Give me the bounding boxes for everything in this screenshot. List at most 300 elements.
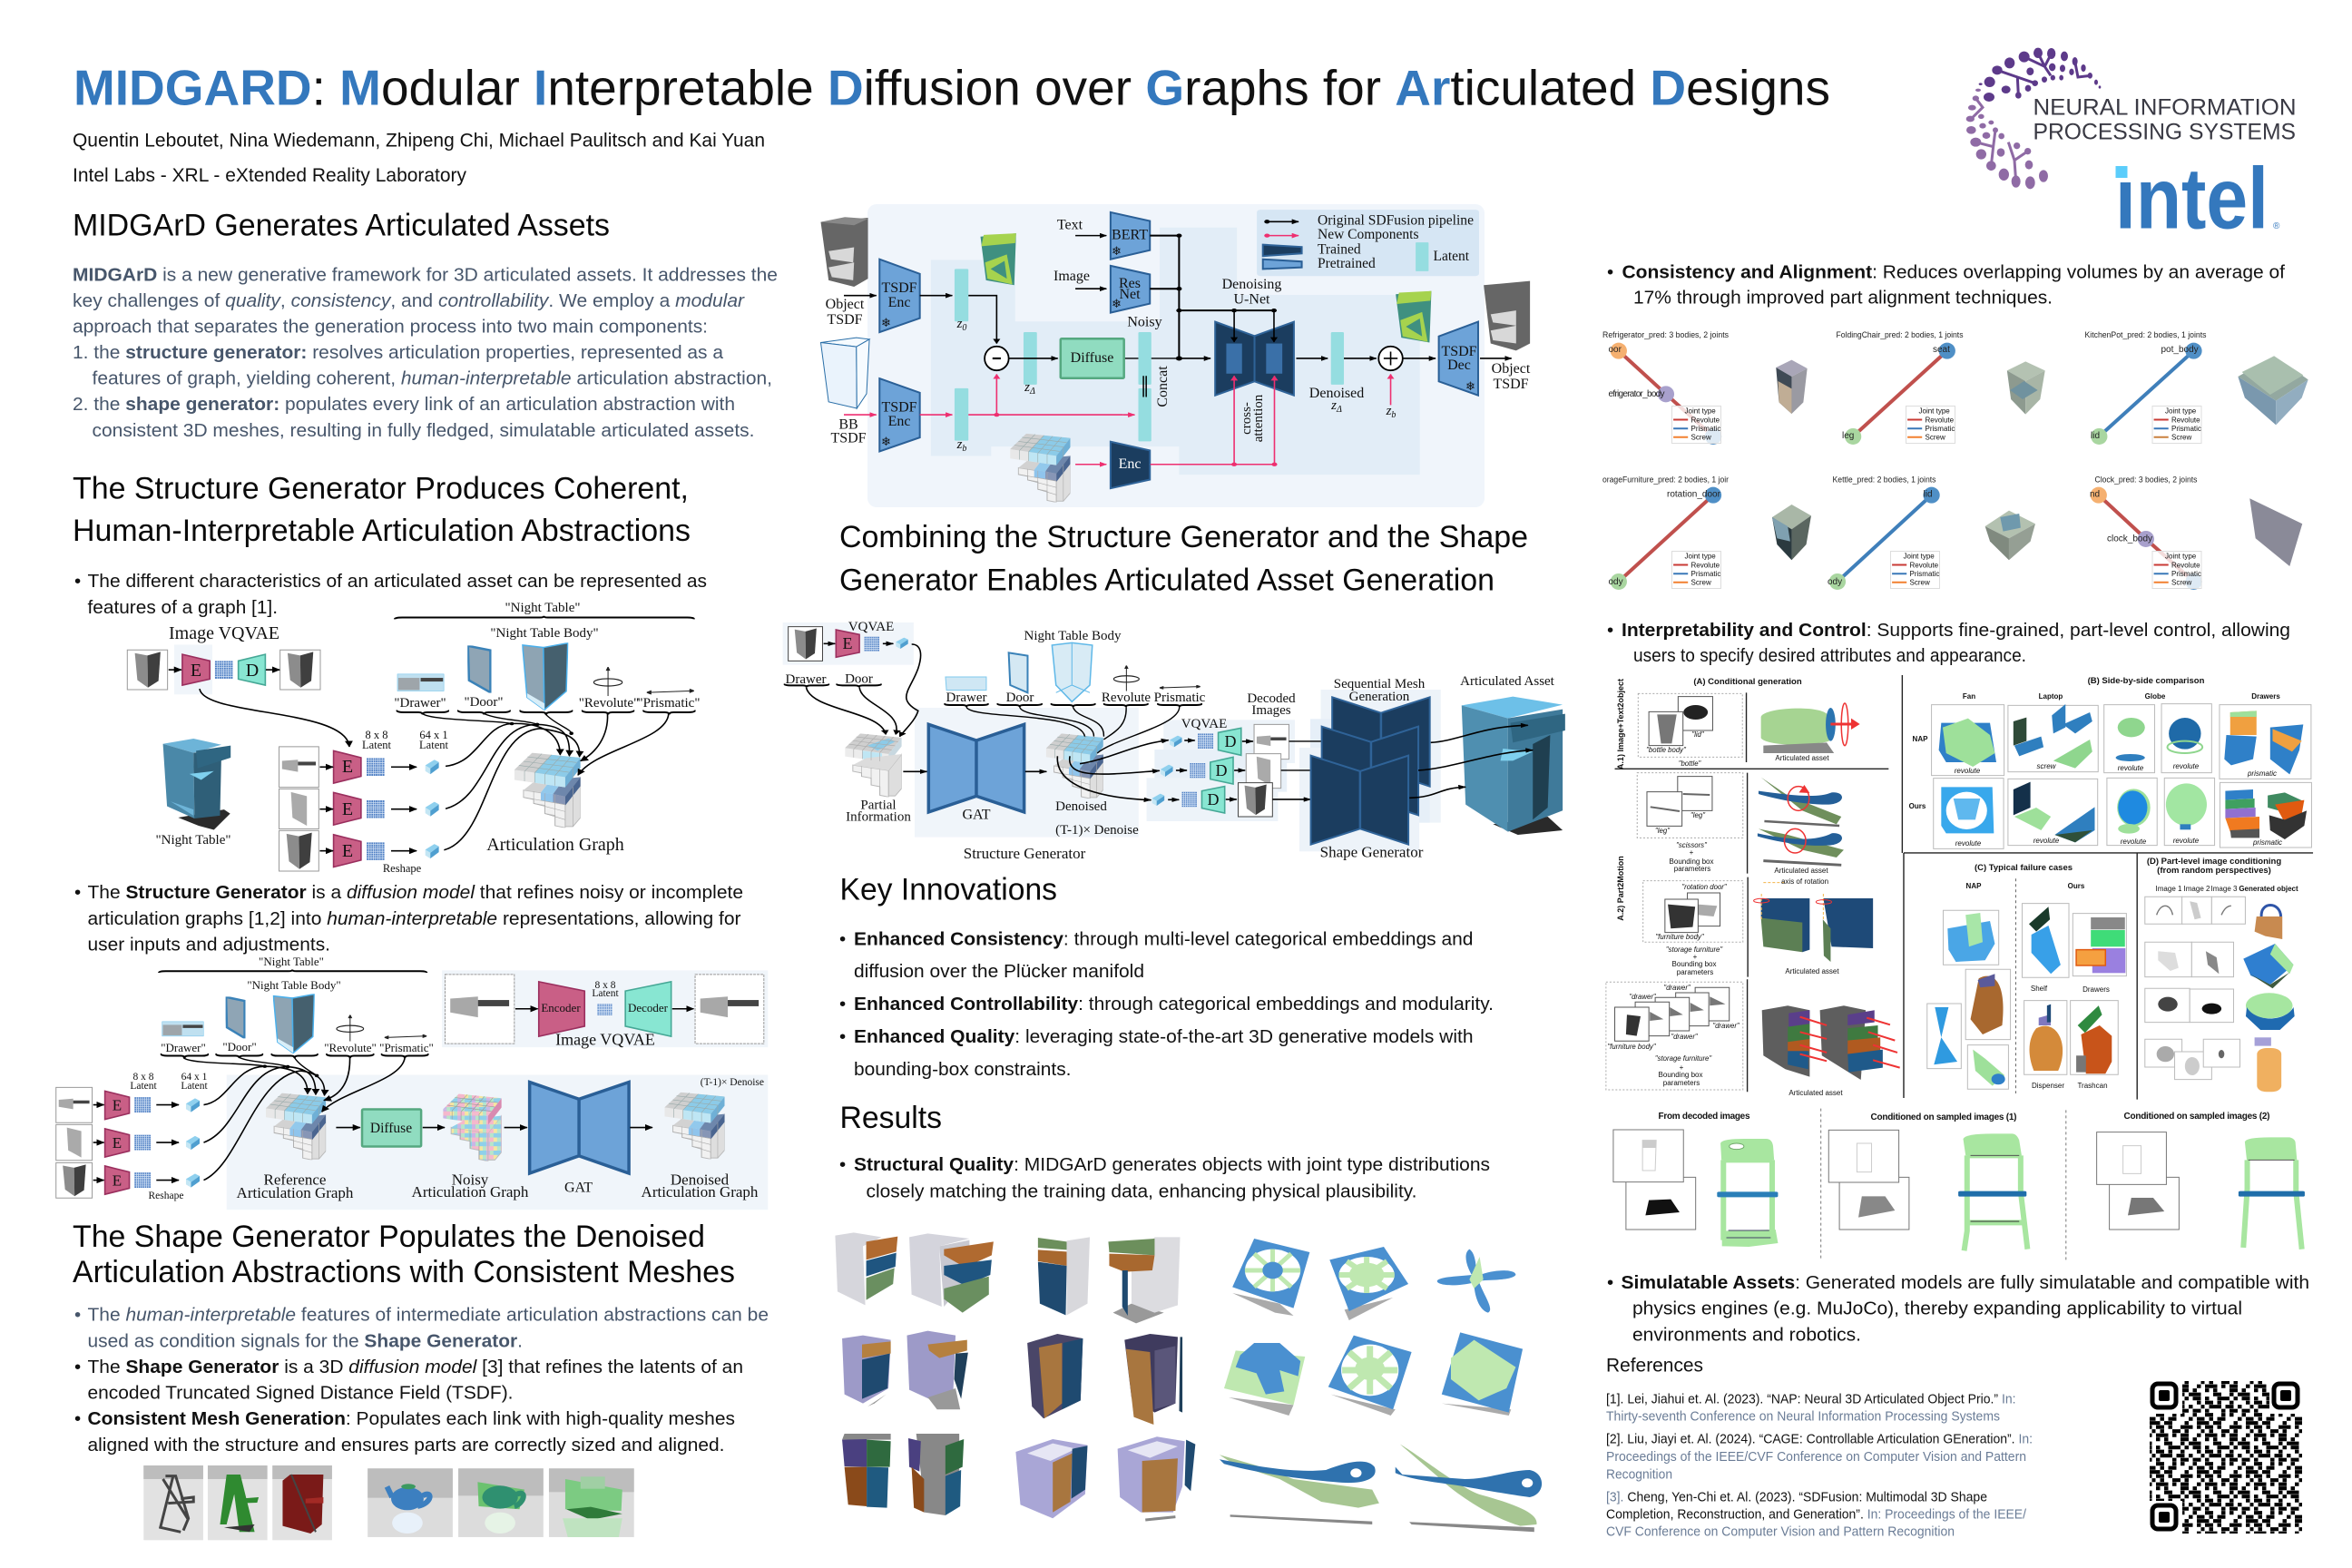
node labels: lid: [1924, 490, 1933, 499]
figure labels: "Night Table": [156, 833, 230, 848]
combined labels: D: [1216, 761, 1227, 779]
bullets: •: [839, 929, 846, 949]
legend 5: [1891, 552, 1940, 588]
bullets: •: [839, 994, 846, 1014]
architecture labels: Denoised: [1309, 386, 1364, 401]
legend labels: Latent: [1434, 249, 1470, 264]
bullet: interpretability and control: Interpretability and Control : Supports fine-grained, part-level control, allowing: [1622, 620, 2290, 641]
architecture labels: z: [957, 317, 962, 331]
Image VQVAE row: [127, 644, 320, 694]
bullets: Enhanced Consistency : through multi-level categorical embeddings and: [854, 929, 1474, 949]
parts: [946, 642, 1200, 701]
architecture labels: Net: [1119, 287, 1141, 302]
panel titles: (B) Side-by-side comparison: [2088, 676, 2205, 686]
logo: NeurIPS: [1966, 48, 2296, 189]
bullet: simulatable assets: Simulatable Assets: Generated models are fully simulatable and compatible with: [1621, 1272, 2309, 1293]
panel captions: +: [1693, 953, 1698, 961]
pipeline labels: "Revolute": [324, 1041, 377, 1054]
legend 4: Prismatic: [1691, 570, 1720, 578]
architecture labels: TSDF: [1493, 377, 1529, 392]
bullets: aligned with the structure and ensures parts are correctly sized and aligned.: [87, 1435, 724, 1455]
reference list: [3]. Cheng, Yen-Chi et. Al. (2023). “SDFusion: Multimodal 3D Shape: [1606, 1490, 1987, 1504]
intro paragraph: 2. the shape generator: populates every link of an articulation abstraction with: [73, 394, 735, 415]
architecture labels: z: [1331, 398, 1337, 413]
legend 2: Joint type: [1918, 407, 1950, 416]
panel C: [1927, 904, 2126, 1089]
encoders: [879, 212, 1478, 488]
combined labels: D: [1225, 732, 1236, 750]
snowflakes: ❄: [881, 435, 891, 448]
figure labels: 8 x 8: [365, 729, 388, 741]
edges: [1619, 351, 2193, 582]
panel captions: [1607, 730, 2282, 1097]
panel B: [1932, 704, 2311, 848]
bullet: structural quality: [839, 1154, 1490, 1201]
bullet: consistency and alignment: •: [1607, 261, 1613, 283]
feed curves: [966, 707, 1180, 800]
legend 3: [2152, 407, 2201, 443]
legend 4: Joint type: [1684, 552, 1716, 561]
snowflakes: [881, 244, 1475, 448]
panel captions: Dispenser: [2032, 1082, 2064, 1090]
legend 5: Joint type: [1904, 552, 1935, 561]
combined labels: (T-1)× Denoise: [1055, 823, 1139, 838]
reference list: [1]. Lei, Jiahui et. Al. (2023). “NAP: Neural 3D Articulated Object Prio.” In:: [1606, 1392, 2016, 1406]
panel captions: Image 3: [2211, 885, 2238, 893]
figure labels: "Night Table Body": [490, 626, 599, 641]
legend 6: Screw: [2171, 579, 2191, 586]
figure: combined pipeline: [783, 620, 1565, 862]
graph titles: orageFurniture_pred: 2 bodies, 1 joir: [1602, 475, 1729, 485]
figure labels: 64 x 1: [419, 729, 448, 741]
architecture labels: Text: [1057, 218, 1083, 232]
architecture labels: z: [957, 437, 962, 452]
panel: [867, 204, 1485, 507]
architecture labels: Enc: [888, 295, 910, 310]
legend 6: [2152, 552, 2201, 588]
section: Key Innovations: [839, 873, 1494, 1080]
heading: MIDGArD Generates Articulated Assets: [73, 209, 610, 243]
legend 4: Screw: [1691, 579, 1711, 586]
legend 2: Revolute: [1926, 416, 1955, 425]
snowflakes: ❄: [881, 316, 891, 329]
legend 3: Prismatic: [2171, 425, 2201, 433]
legend labels: [1318, 212, 1474, 271]
curves: [183, 1057, 405, 1181]
heading: Results: [840, 1101, 942, 1135]
bullet: interpretability and control: •: [1607, 620, 1613, 641]
panel captions: Trashcan: [2077, 1082, 2108, 1090]
reference list: Thirty-seventh Conference on Neural Information Processing Systems: [1606, 1408, 2000, 1425]
combined labels: Night Table Body: [1024, 629, 1122, 643]
figure labels: E: [191, 661, 201, 681]
graph titles: KitchenPot_pred: 2 bodies, 1 joints: [2085, 330, 2207, 339]
panel titles: (A) Conditional generation: [1693, 677, 1802, 687]
architecture labels: Noisy: [1127, 314, 1162, 330]
combined labels: Structure Generator: [964, 845, 1086, 862]
panel captions: Image 1: [2156, 885, 2182, 893]
graph titles: [1602, 330, 2207, 485]
figure labels: "Prismatic": [638, 696, 700, 710]
architecture labels: cross-: [1240, 402, 1254, 435]
architecture labels: Object: [826, 297, 865, 312]
chair titles: [1659, 1112, 2270, 1122]
combined labels: Partial: [860, 799, 897, 813]
bullets: [74, 1305, 769, 1455]
heading: combining: Generator Enables Articulated Asset Generation: [839, 563, 1494, 597]
legend 6: Revolute: [2171, 561, 2200, 570]
panel captions: revolute: [2118, 764, 2144, 772]
combined labels: Drawer: [946, 691, 986, 705]
legend 2: Screw: [1926, 434, 1945, 441]
pipeline labels: Denoised: [671, 1171, 730, 1189]
chair 1: [1717, 1139, 1778, 1247]
combined labels: VQVAE: [848, 620, 894, 634]
logo: Intel: intel: [2115, 151, 2269, 248]
panel captions: "leg": [1655, 827, 1671, 835]
bullet: structure generator: The Structure Generator is a diffusion model that refines noisy or incomplete: [87, 882, 743, 903]
panel captions: Bounding box: [1672, 960, 1716, 968]
chair titles: From decoded images: [1659, 1112, 1750, 1122]
GAT: [530, 1083, 629, 1173]
section: Shape Generator: [73, 1220, 769, 1540]
panel captions: screw: [2037, 762, 2057, 770]
figure labels: Latent: [362, 739, 391, 751]
figure: articulation graph encoding: [127, 601, 700, 875]
cube: [1010, 434, 1070, 503]
heading: The Structure Generator Produces Coherent,: [73, 472, 689, 506]
partial cube: [845, 733, 902, 797]
node labels: lid: [2091, 431, 2100, 441]
architecture labels: TSDF: [1441, 344, 1477, 359]
pipeline labels: (T-1)× Denoise: [701, 1077, 764, 1088]
architecture labels: U-Net: [1234, 292, 1270, 307]
panel titles: Ours: [1909, 802, 1926, 810]
bullets: Enhanced Controllability : through categorical embeddings and modularity.: [854, 994, 1494, 1014]
legend 6: Joint type: [2165, 552, 2197, 561]
combined labels: [786, 620, 1555, 862]
figure: diffusion pipeline: [56, 955, 768, 1210]
panel captions: parameters: [1674, 865, 1710, 873]
scissors: [1220, 1445, 1542, 1532]
bullets: bounding-box constraints.: [854, 1059, 1071, 1080]
pipeline labels: [113, 955, 764, 1201]
panel: denoising: [227, 1075, 768, 1210]
panel captions: parameters: [1677, 968, 1713, 976]
renders: chair and teapot: [143, 1465, 634, 1540]
combined labels: Sequential Mesh: [1334, 677, 1426, 691]
bullet: consistency and alignment: 17% through improved part alignment techniques.: [1633, 287, 2053, 309]
bullet: structural quality: Structural Quality: MIDGArD generates objects with joint type distributions: [854, 1154, 1490, 1175]
reference list: Recognition: [1606, 1466, 1672, 1483]
node labels: [1608, 345, 2199, 587]
node labels: leg: [1842, 431, 1854, 441]
legend labels: Original SDFusion pipeline: [1318, 212, 1474, 229]
panel titles: (from random perspectives): [2157, 866, 2271, 876]
braces and curves: [784, 644, 1202, 771]
VQVAE input: [789, 627, 908, 661]
combined labels: Information: [846, 809, 911, 824]
intro paragraph: consistent 3D meshes, resulting in fully fledged, simulatable articulated assets.: [93, 420, 755, 441]
panels: [783, 622, 1441, 851]
legend 5: Revolute: [1909, 561, 1939, 570]
legend labels: Pretrained: [1318, 256, 1376, 271]
panel captions: Image 2: [2184, 885, 2210, 893]
textured objects: [981, 233, 1530, 350]
combined labels: Shape Generator: [1320, 844, 1424, 860]
pipeline labels: Image VQVAE: [555, 1031, 655, 1049]
pipeline labels: Articulation Graph: [412, 1183, 529, 1200]
architecture labels: Δ: [1336, 405, 1342, 415]
panel captions: "drawer": [1663, 984, 1691, 992]
bullet: simulatable assets: environments and robotics.: [1632, 1325, 1861, 1345]
bullets: Consistent Mesh Generation : Populates each link with high-quality meshes: [87, 1408, 735, 1429]
decode rows: [1152, 724, 1321, 817]
panel titles: A.2) Part2Motion: [1616, 856, 1625, 921]
combined labels: Decoded: [1247, 691, 1296, 706]
dividers: [1821, 1109, 2066, 1261]
bullet: structural quality: closely matching the training data, enhancing physical plausibility.: [866, 1181, 1417, 1201]
architecture labels: BERT: [1112, 227, 1148, 243]
figure labels: Articulation Graph: [486, 835, 624, 855]
architecture labels: z: [1387, 404, 1391, 418]
figure labels: Reshape: [383, 862, 422, 875]
figure labels: "Door": [464, 695, 504, 710]
panel captions: "furniture body": [1607, 1043, 1657, 1051]
bullets: used as condition signals for the Shape Generator.: [87, 1330, 523, 1352]
panel captions: "bottle body": [1646, 746, 1687, 754]
Diffuse box: [1061, 338, 1124, 378]
panel titles: NAP: [1966, 882, 1982, 890]
panel titles: Fan: [1963, 692, 1975, 701]
legend labels: Trained: [1318, 241, 1361, 258]
results gallery: [835, 1232, 1542, 1532]
panel captions: prismatic: [2247, 769, 2277, 778]
pipeline labels: Articulation Graph: [642, 1183, 759, 1200]
architecture labels: Enc: [888, 414, 910, 429]
graph titles: Kettle_pred: 2 bodies, 1 joints: [1833, 475, 1936, 485]
dividers: [1615, 675, 2313, 1100]
bullets: [839, 929, 1494, 1080]
chair titles: Conditioned on sampled images (2): [2123, 1112, 2270, 1122]
pipeline labels: Noisy: [452, 1171, 489, 1189]
intro paragraph: MIDGArD is a new generative framework for 3D articulated assets. It addresses the: [73, 265, 778, 285]
pipeline labels: E: [113, 1096, 122, 1114]
intro paragraph: key challenges of quality, consistency, and controllability. We employ a modular: [73, 290, 745, 311]
panel captions: revolute: [2173, 837, 2200, 845]
chair titles: Conditioned on sampled images (1): [1871, 1112, 2016, 1122]
bullet: structure generator: articulation graphs [1,2] into human-interpretable representations, allowing for: [87, 908, 741, 929]
figure labels: "Night Table": [505, 601, 581, 615]
snowflakes: ❄: [1465, 379, 1475, 393]
architecture labels: Diffuse: [1071, 350, 1113, 366]
pipeline labels: "Night Table Body": [247, 978, 341, 992]
node labels: clock_body: [2107, 534, 2152, 544]
node labels: rotation_door: [1667, 490, 1721, 499]
bullet: structure generator: user inputs and adjustments.: [87, 935, 330, 955]
heading: Key Innovations: [840, 873, 1057, 907]
figure: chair conditioning: [1613, 1109, 2305, 1261]
panel captions: "drawer": [1671, 1033, 1699, 1041]
pipeline labels: 64 x 1: [181, 1072, 208, 1083]
snowflakes: ❄: [1112, 297, 1122, 310]
noisy cube: [443, 1094, 502, 1161]
shape generators: [1311, 697, 1430, 845]
pipeline labels: "Drawer": [161, 1041, 206, 1054]
combined labels: VQVAE: [1181, 717, 1227, 731]
panel captions: Articulated asset: [1775, 754, 1829, 762]
latents: [955, 269, 1344, 441]
logo: NeurIPS: PROCESSING SYSTEMS: [2033, 120, 2296, 144]
architecture labels: TSDF: [830, 430, 867, 446]
bullet: interpretability and control: [1607, 620, 2290, 666]
bullet: graph features: The different characteristics of an articulated asset can be represented as: [87, 571, 707, 592]
panel captions: Articulated asset: [1788, 1089, 1843, 1097]
rows encoder: [279, 747, 439, 871]
figure labels: Latent: [419, 739, 448, 751]
figure labels: Image VQVAE: [169, 623, 279, 643]
GAT: [928, 724, 1046, 812]
heading: Articulation Abstractions with Consistent Meshes: [73, 1255, 735, 1289]
node labels: seat: [1933, 345, 1950, 355]
legend 1: Joint type: [1684, 407, 1716, 416]
architecture labels: Concat: [1155, 366, 1171, 407]
operators: [985, 347, 1403, 370]
panel titles: (D) Part-level image conditioning: [2147, 857, 2281, 867]
architecture labels: Image: [1054, 269, 1090, 284]
node labels: ody: [1608, 577, 1623, 587]
panel titles: (C) Typical failure cases: [1975, 863, 2073, 873]
graph titles: FoldingChair_pred: 2 bodies, 1 joints: [1837, 330, 1964, 339]
panel titles: Ours: [2068, 882, 2085, 890]
architecture labels: Res: [1119, 276, 1141, 291]
parts: [159, 969, 429, 1058]
figure: joint graphs: [1602, 330, 2308, 590]
section: Results: [839, 1101, 1490, 1201]
panel captions: revolute: [2121, 838, 2147, 846]
figure: comparison panels: [1606, 675, 2313, 1100]
pipeline labels: GAT: [564, 1180, 593, 1196]
heading: [73, 1220, 735, 1289]
figure: shape generator architecture: [820, 204, 1531, 507]
panel captions: axis of rotation: [1781, 877, 1828, 886]
architecture labels: TSDF: [881, 280, 917, 296]
combined labels: Door: [1006, 691, 1034, 705]
pipeline labels: Latent: [181, 1081, 208, 1092]
nodes: [1611, 343, 2202, 590]
pipeline labels: 8 x 8: [132, 1072, 154, 1083]
figure labels: "Revolute": [579, 696, 639, 710]
panel titles: Drawers: [2251, 692, 2280, 701]
graph titles: Clock_pred: 3 bodies, 2 joints: [2094, 475, 2198, 485]
bullets: •: [74, 1305, 81, 1325]
inner regions: [931, 228, 1420, 475]
heading: The Shape Generator Populates the Denoised: [73, 1220, 705, 1254]
combined labels: Generation: [1349, 690, 1410, 704]
pipeline labels: "Door": [222, 1040, 257, 1054]
reference list: [2]. Liu, Jiayi et. Al. (2024). “CAGE: Controllable Articulation GEneration”. In:: [1606, 1432, 2033, 1446]
bullets: •: [74, 1408, 81, 1429]
figure labels: "Drawer": [394, 696, 446, 710]
panel titles: NAP: [1913, 735, 1928, 743]
heading: [73, 472, 691, 548]
panel captions: "leg": [1690, 811, 1706, 819]
panel titles: [1616, 676, 2298, 921]
panel captions: "furniture body": [1655, 933, 1705, 941]
legend 2: [1906, 407, 1955, 443]
architecture labels: BB: [838, 417, 858, 432]
panel captions: Shelf: [2031, 985, 2048, 993]
articulation graph cube: [514, 753, 581, 828]
panel titles: A.1) Image+Text2object: [1616, 679, 1625, 769]
bullets: •: [74, 1357, 81, 1377]
bullet: simulatable assets: [1607, 1272, 2309, 1345]
architecture labels: Denoising: [1222, 277, 1281, 292]
bullets: The human-interpretable features of intermediate articulation abstractions can be: [87, 1305, 769, 1325]
pipeline labels: Latent: [130, 1081, 157, 1092]
denoising U-Net: [1151, 310, 1294, 466]
connecting curves: [200, 689, 669, 850]
panel D: [2145, 897, 2295, 1092]
references: [1606, 1356, 2033, 1539]
pipeline labels: Diffuse: [370, 1121, 412, 1136]
intro paragraph: features of graph, yielding coherent, human-interpretable articulation abstraction,: [93, 368, 772, 388]
architecture labels: Enc: [1119, 456, 1141, 472]
figure labels: D: [246, 661, 259, 681]
panel titles: Globe: [2145, 692, 2166, 701]
panel captions: Articulated asset: [1774, 867, 1828, 875]
panel captions: "scissors": [1676, 841, 1708, 849]
legend labels: New Components: [1318, 227, 1419, 242]
pipeline labels: Reference: [264, 1171, 326, 1189]
heading: combining: Combining the Structure Generator and the Shape: [839, 520, 1528, 554]
architecture labels: attention: [1251, 394, 1266, 442]
combined labels: Revolute: [1102, 691, 1151, 705]
section: MIDGArD Generates Articulated Assets: [73, 209, 778, 441]
chair 2: [1958, 1133, 2027, 1250]
panel titles: Laptop: [2039, 692, 2063, 701]
figure labels: [156, 601, 700, 875]
legend 3: Joint type: [2165, 407, 2197, 416]
architecture labels: b: [1391, 410, 1396, 420]
cabinets row 3: [842, 1434, 1195, 1520]
node labels: ody: [1828, 577, 1842, 587]
panel captions: Drawers: [2082, 985, 2110, 994]
bullet: graph features: features of a graph [1].: [87, 597, 278, 618]
authors: Quentin Leboutet, Nina Wiedemann, Zhipeng Chi, Michael Paulitsch and Kai Yuan: [73, 129, 765, 151]
title: MIDGARD: Modular Interpretable Diffusion over Graphs for Articulated Designs: [74, 60, 1830, 116]
panel titles: Generated object: [2239, 885, 2298, 893]
legend 3: Screw: [2171, 434, 2191, 441]
flow lines: [920, 233, 1512, 465]
bullet: structural quality: •: [839, 1154, 846, 1175]
bullet: graph features: •: [74, 571, 81, 592]
reference list: [1606, 1392, 2033, 1539]
reference list: CVF Conference on Computer Vision and Pattern Recognition: [1606, 1524, 1955, 1539]
legend 1: [1671, 407, 1720, 443]
bullets: •: [839, 1026, 846, 1047]
panel A: [1606, 693, 1900, 1090]
architecture labels: Object: [1492, 361, 1531, 377]
bullets: diffusion over the Plücker manifold: [854, 961, 1144, 982]
figure labels: E: [342, 799, 353, 819]
3D boxes: [1772, 356, 2308, 566]
intro paragraph: 1. the structure generator: resolves articulation properties, represented as a: [73, 342, 724, 363]
legend 1: Revolute: [1691, 416, 1720, 425]
icon: night table: [163, 739, 230, 829]
bullet: structure generator: [74, 882, 743, 955]
combined labels: Prismatic: [1154, 691, 1206, 705]
